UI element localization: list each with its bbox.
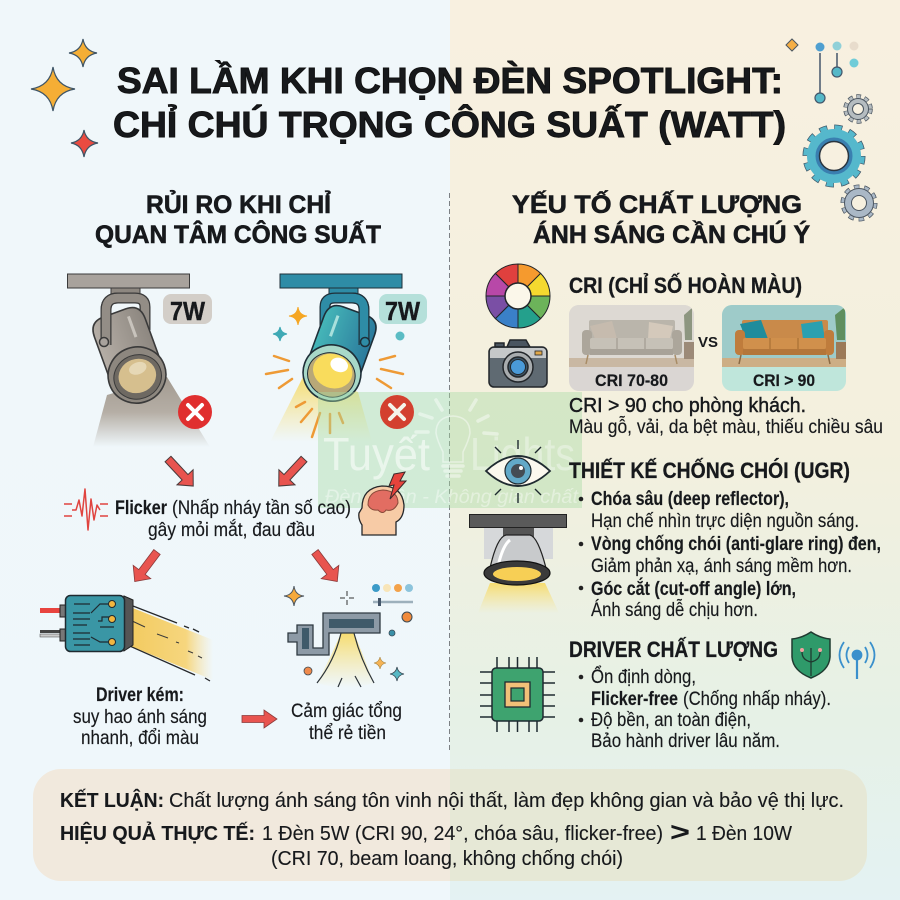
list: driver: (Chống nhấp nháy).	[683, 689, 831, 710]
image: sofa CRI over 90: CRI > 90	[753, 371, 815, 390]
text: flicker: Flicker	[115, 498, 168, 519]
title	[113, 60, 786, 145]
title: CHỈ CHÚ TRỌNG CÔNG SUẤT (WATT)	[113, 103, 786, 145]
icon: poor driver with fading beam	[40, 596, 213, 681]
heading: right column	[512, 189, 810, 249]
list: anti-glare	[579, 489, 881, 621]
icon: downlight with deep reflector	[470, 514, 566, 613]
text: poor driver: Driver kém:	[96, 685, 184, 706]
text: real effect line: >	[670, 817, 690, 847]
arrow: driver to cheap feel	[242, 710, 277, 728]
text: poor driver: suy hao ánh sáng	[73, 707, 207, 728]
list: anti-glare: Giảm phản xạ, ánh sáng mềm hơn.	[591, 556, 852, 577]
arrow: flicker to driver	[126, 545, 166, 588]
image: sofa CRI 70-80: CRI 70-80	[595, 371, 668, 390]
text: poor driver: nhanh, đổi màu	[81, 728, 199, 749]
heading: left column	[95, 189, 381, 249]
watermark: Tuyết	[323, 428, 430, 480]
icon: cheap lamp with sparkles	[284, 584, 413, 688]
watermark: Đèn thuận - Không gian chất	[325, 487, 579, 508]
icon: gears and dots top right	[786, 39, 874, 218]
text: cheap feel: thể rẻ tiền	[309, 723, 386, 744]
text: CRI note: CRI > 90 cho phòng khách.	[569, 395, 806, 417]
text: cheap feel: Cảm giác tổng	[291, 701, 402, 722]
text: real effect line: 1 Đèn 5W (CRI 90, 24°, chóa sâu, flicker-free)	[262, 822, 663, 845]
list: driver: Ổn định dòng,	[591, 666, 696, 688]
icon: head with headache	[359, 472, 406, 535]
arrow: flicker to cheap feel	[306, 545, 346, 588]
text: poor driver	[73, 685, 207, 749]
list: driver: Flicker-free	[591, 689, 678, 710]
text: flicker: (Nhấp nháy tần số cao)	[172, 498, 351, 519]
list: driver: Độ bền, an toàn điện,	[591, 710, 751, 731]
icon: red x gray lamp	[178, 395, 212, 429]
text: real effect line	[60, 817, 793, 870]
arrow: gray lamp to flicker	[160, 451, 201, 494]
text: conclusion line: Chất lượng ánh sáng tôn vinh nội thất, làm đẹp không gian và bảo vệ thị lực.	[169, 789, 844, 812]
text: real effect line: 1 Đèn 10W	[696, 822, 793, 845]
heading: driver: DRIVER CHẤT LƯỢNG	[569, 637, 778, 662]
image: sofa CRI 70-80	[569, 305, 694, 391]
text: flicker: gây mỏi mắt, đau đầu	[148, 519, 315, 541]
icon: microchip	[480, 657, 555, 732]
heading: left column: RỦI RO KHI CHỈ	[146, 189, 331, 219]
heading: CRI: CRI (CHỈ SỐ HOÀN MÀU)	[569, 272, 802, 298]
image: sofa CRI over 90	[722, 305, 846, 391]
list: anti-glare: Hạn chế nhìn trực diện nguồn sáng.	[591, 511, 859, 532]
arrow: teal lamp to flicker	[271, 451, 312, 494]
watermark: Lights	[470, 428, 575, 480]
heading: left column: QUAN TÂM CÔNG SUẤT	[95, 219, 381, 249]
icon: color wheel	[486, 264, 550, 328]
text: conclusion line: KẾT LUẬN:	[60, 788, 164, 812]
label: 7W teal: 7W	[385, 296, 420, 326]
icon: eye	[486, 440, 550, 503]
icon: camera	[489, 340, 547, 387]
title: SAI LẦM KHI CHỌN ĐÈN SPOTLIGHT:	[117, 60, 783, 101]
icon: sparkles top left	[31, 39, 98, 157]
text: real effect line: (CRI 70, beam loang, không chống chói)	[271, 847, 623, 870]
icon: antenna	[840, 642, 874, 679]
heading: right column: ÁNH SÁNG CẦN CHÚ Ý	[533, 219, 810, 249]
icon: shield	[792, 632, 830, 678]
column divider	[448, 193, 450, 750]
text: CRI note	[569, 395, 883, 438]
label: 7W gray: 7W	[170, 296, 205, 326]
text: flicker	[115, 498, 351, 541]
text: real effect line: HIỆU QUẢ THỰC TẾ:	[60, 821, 255, 845]
icon: flicker waveform	[64, 489, 108, 530]
heading: right column: YẾU TỐ CHẤT LƯỢNG	[512, 189, 802, 219]
text: vs: VS	[698, 334, 718, 351]
icon: dull gray spotlight	[68, 274, 210, 447]
list: anti-glare: Chóa sâu (deep reflector),	[591, 489, 789, 510]
text: cheap feel	[291, 701, 402, 744]
icon: red x teal lamp	[380, 395, 414, 429]
panel: conclusion	[33, 769, 867, 881]
heading: UGR: THIẾT KẾ CHỐNG CHÓI (UGR)	[569, 457, 850, 483]
list: anti-glare: Ánh sáng dễ chịu hơn.	[591, 599, 758, 621]
list: driver	[579, 666, 831, 752]
icon: bright teal spotlight	[266, 274, 404, 442]
watermark	[318, 392, 582, 508]
list: driver: Bảo hành driver lâu năm.	[591, 731, 780, 752]
list: anti-glare: Góc cắt (cut-off angle) lớn,	[591, 578, 796, 600]
